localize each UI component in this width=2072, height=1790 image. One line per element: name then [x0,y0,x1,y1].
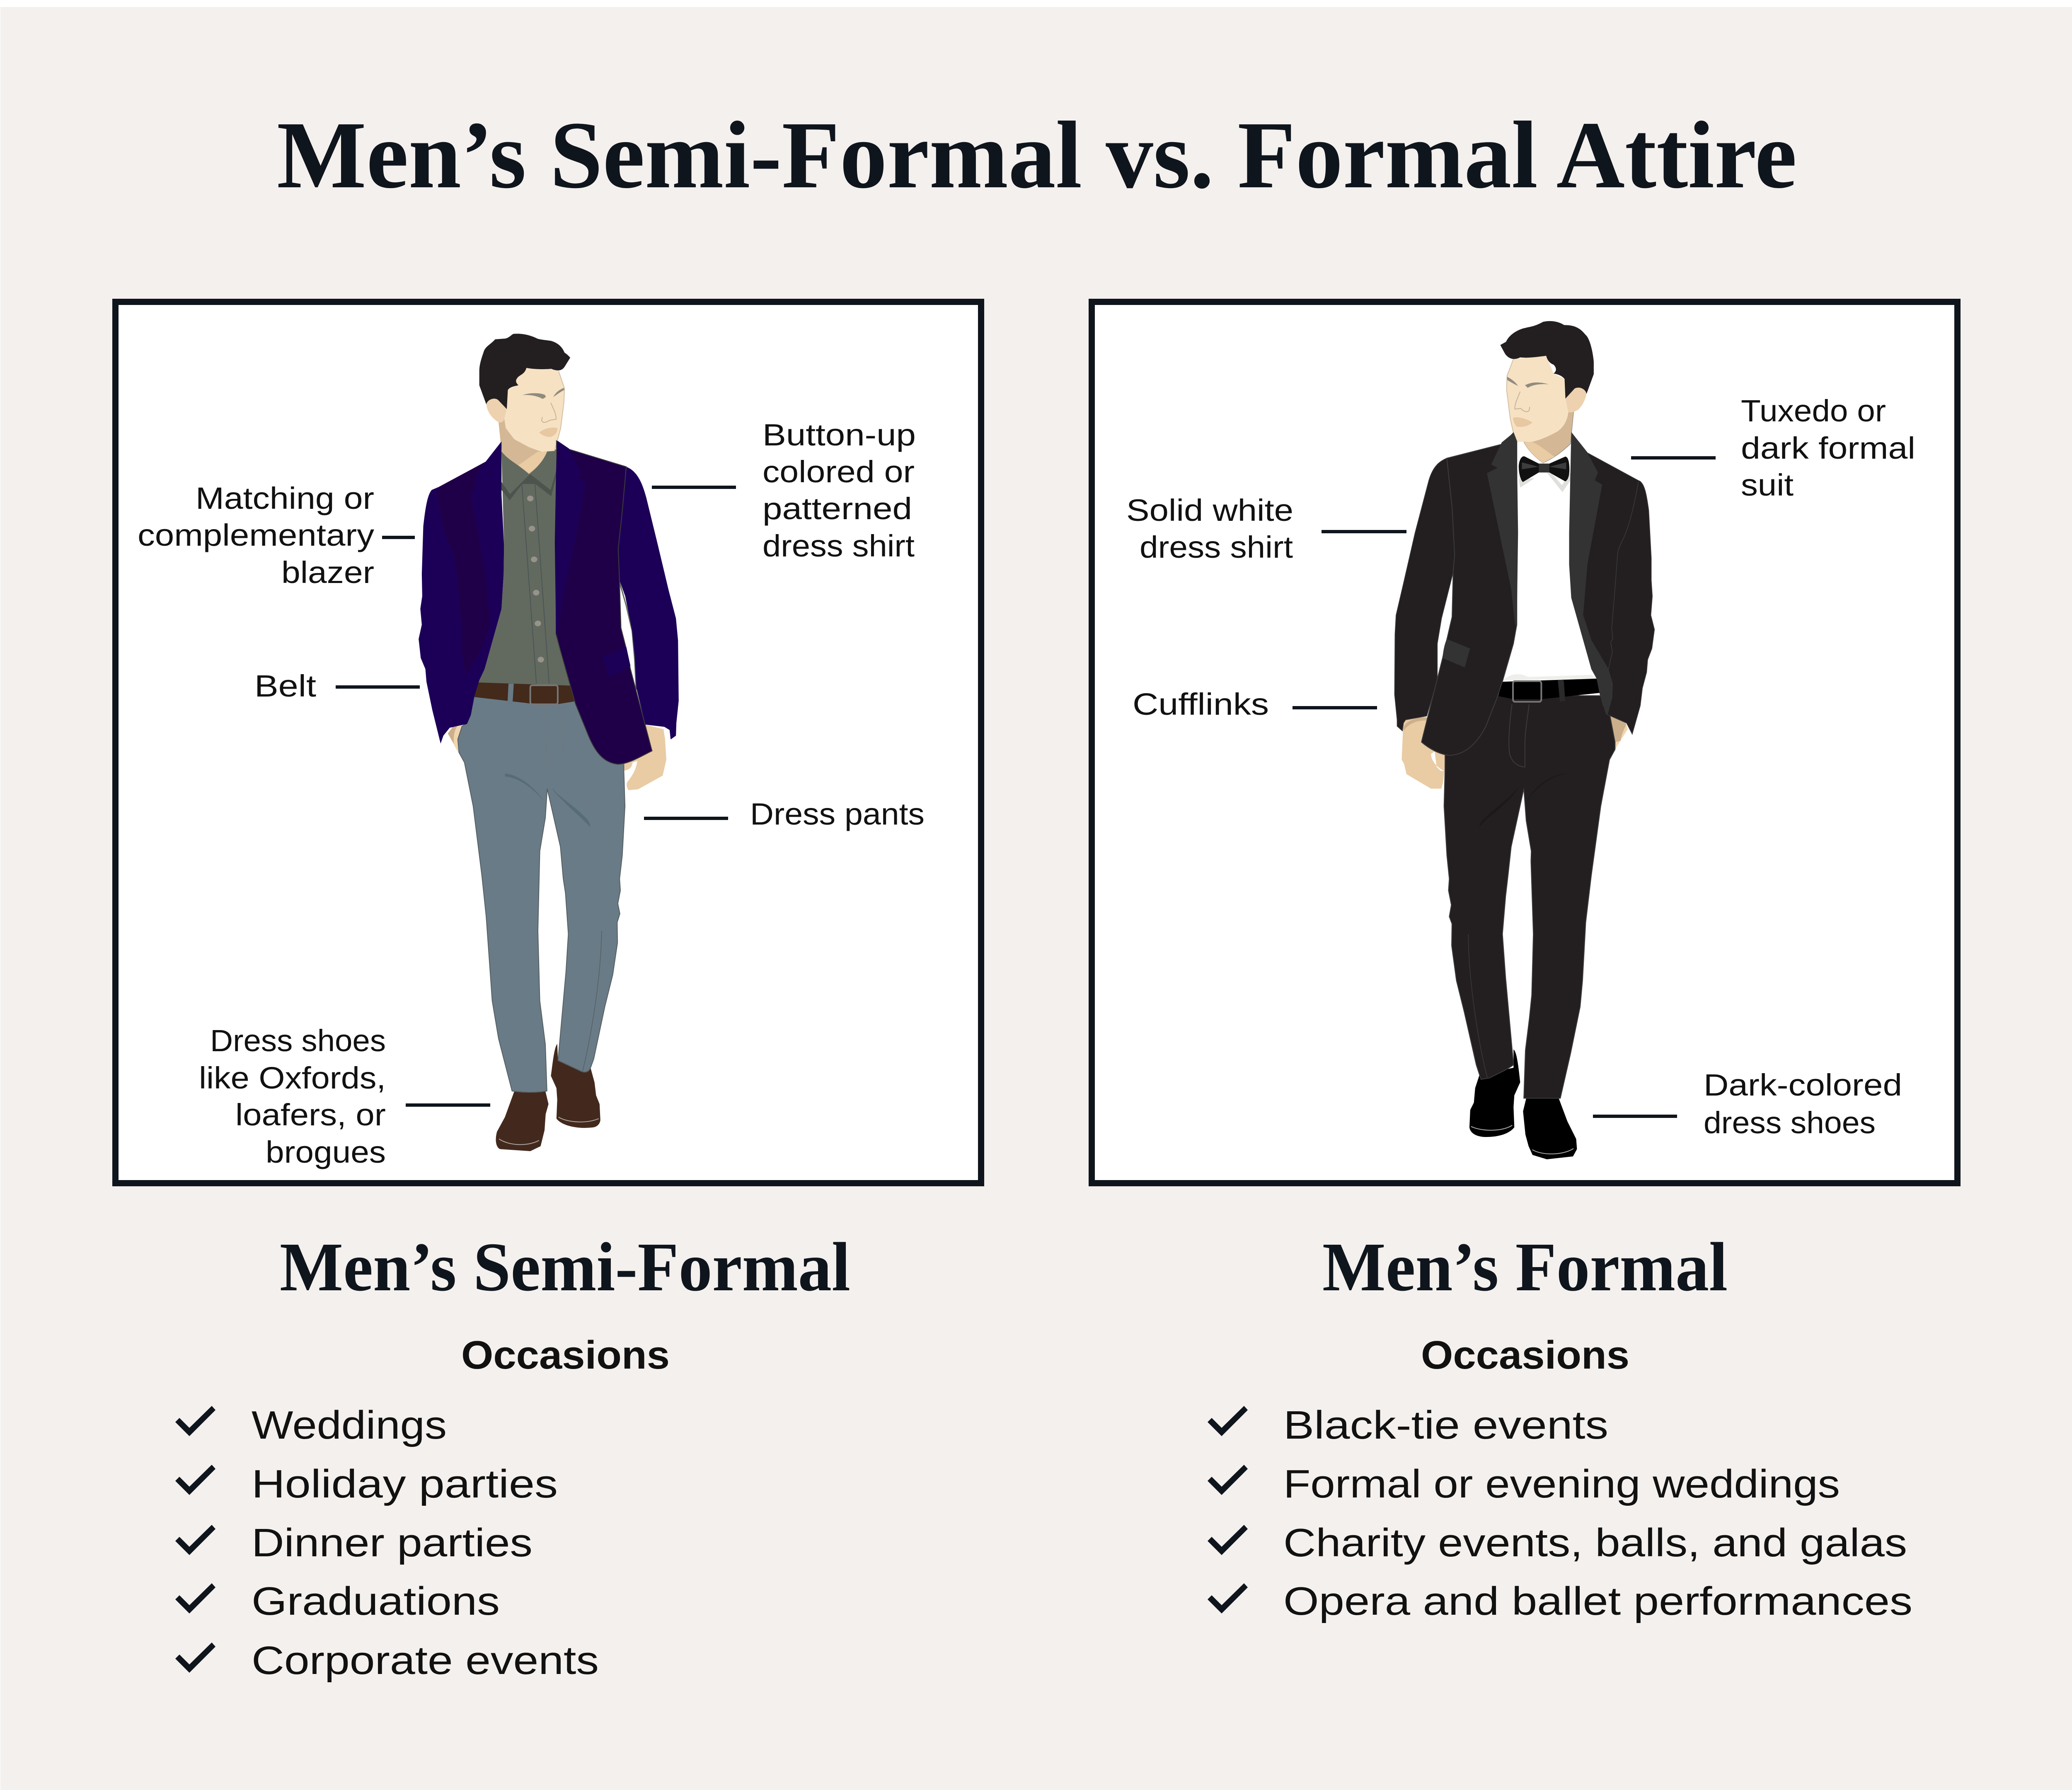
item: graduations [175,1579,500,1623]
callout: dress pants [644,797,925,831]
blazer [620,582,636,690]
item: holiday parties: Holiday parties [252,1462,558,1506]
item: opera and ballet: Opera and ballet performances [1283,1579,1912,1623]
item: dinner parties [175,1521,533,1565]
panel: semi-formal outfit [115,302,981,1183]
neck and face [499,418,557,474]
callout: dress pants: Dress pants [750,797,925,831]
callout: cufflinks: Cufflinks [1133,687,1269,721]
callout: dress shirt: colored or [762,455,915,489]
callout: white shirt: Solid white [1126,493,1293,527]
callout: belt: Belt [254,669,317,703]
illustration: man in blazer [419,334,679,1151]
item: charity events: Charity events, balls, and galas [1283,1521,1907,1565]
callout: dress shirt: Button-up [762,418,916,452]
item: black-tie events: Black-tie events [1283,1403,1608,1447]
legs, hands and shoes [1402,696,1628,1159]
callout: dress shirt: patterned [762,491,912,526]
callout: white shirt: dress shirt [1140,530,1293,564]
callout: dress shoes: loafers, or [235,1098,386,1132]
occasions list: formal: Occasions [1421,1333,1629,1377]
torso and head [1394,321,1654,755]
callout: cufflinks [1133,687,1377,721]
neck and face [1524,406,1573,463]
belt [1498,679,1600,699]
occasions list: semi-formal [175,1333,670,1683]
shirt [476,449,570,687]
item: graduations: Graduations [252,1579,500,1623]
callout: blazer: Matching or [196,481,374,515]
callout: white shirt [1126,493,1406,564]
bow tie [1519,456,1569,482]
occasions list: semi-formal: Occasions [461,1333,670,1377]
callout: blazer: complementary [138,518,374,552]
tuxedo jacket [1394,458,1455,731]
callout: blazer: blazer [281,555,374,590]
title: Men’s Semi-Formal vs. Formal Attire [277,102,1797,208]
callout: blazer [138,481,415,590]
belt [474,682,574,704]
callout: tuxedo: suit [1741,468,1794,502]
callout: dark shoes: dress shoes [1704,1105,1876,1140]
heading: men's formal: Men’s Formal [1322,1229,1728,1306]
callout: belt [254,669,420,703]
callout: tuxedo: dark formal [1741,431,1915,465]
callout: dress shirt [652,418,916,563]
legs, hands and shoes [448,696,666,1151]
item: weddings [175,1403,447,1447]
panel: formal outfit [1092,302,1958,1183]
callout: dress shirt: dress shirt [762,529,915,563]
callout: dark shoes [1593,1068,1902,1140]
callout: dress shoes [199,1023,490,1169]
torso and head [419,334,679,764]
occasions list: formal [1208,1333,1912,1623]
callout: dress shoes: Dress shoes [210,1023,386,1058]
item: dinner parties: Dinner parties [252,1521,533,1565]
item: corporate events: Corporate events [252,1638,599,1683]
callout: tuxedo [1631,394,1915,502]
item: weddings: Weddings [252,1403,447,1447]
callout: tuxedo: Tuxedo or [1741,394,1886,428]
heading: men's semi-formal: Men’s Semi-Formal [280,1229,850,1306]
callout: dress shoes: like Oxfords, [199,1061,386,1095]
item: formal or evening weddings: Formal or evening weddings [1283,1462,1840,1506]
callout: dark shoes: Dark-colored [1704,1068,1902,1102]
callout: dress shoes: brogues [266,1135,386,1169]
illustration: man in tuxedo [1394,321,1654,1159]
item: holiday parties [175,1462,558,1506]
shirt [1503,438,1597,682]
